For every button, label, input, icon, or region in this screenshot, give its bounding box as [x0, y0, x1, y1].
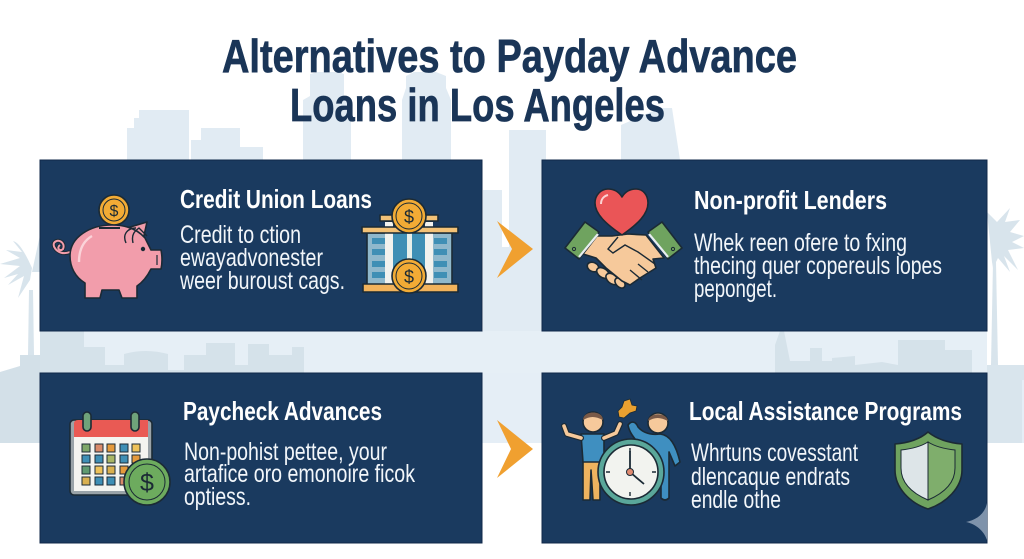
text: local assistance programs: Whrtuns covesstant — [691, 439, 858, 467]
icon: calendar with dollar coin — [70, 412, 170, 505]
text: credit union loans: Credit to ction — [180, 221, 301, 249]
arrow: bottom row — [497, 420, 533, 478]
icon: people and clock — [564, 399, 680, 505]
text: non-profit lenders: Non-profit Lenders — [694, 185, 887, 215]
icon: calendar with dollar coin: $ — [140, 469, 154, 497]
text: paycheck advances: artafice oro emonoire ficok — [184, 460, 415, 488]
text: non-profit lenders: peponget. — [694, 275, 777, 303]
title: Alternatives to Payday Advance — [222, 30, 797, 82]
arrow: top row — [497, 221, 533, 278]
text: local assistance programs: dlencaque endrats — [691, 463, 850, 491]
left palm — [0, 235, 40, 355]
text: credit union loans: Credit Union Loans — [180, 184, 372, 214]
icon: shield — [895, 432, 962, 509]
text: credit union loans: ewayadvonester — [180, 244, 323, 272]
text: local assistance programs — [689, 396, 962, 514]
title: Loans in Los Angeles — [290, 79, 665, 131]
icon: piggy bank with coin: $ — [110, 203, 119, 220]
text: paycheck advances — [183, 396, 415, 511]
background: Los Angeles skyline — [0, 72, 1024, 443]
panel: local assistance programs — [542, 373, 987, 543]
icon: bank with coins: $ — [404, 267, 414, 287]
icon: bank with coins: $ — [404, 207, 414, 227]
text: local assistance programs: Local Assistance Programs — [689, 396, 962, 426]
icon: handshake with heart — [565, 189, 682, 290]
text: credit union loans — [179, 184, 372, 295]
text: non-profit lenders: thecing quer copereuls lopes — [694, 252, 942, 280]
text: non-profit lenders: Whek reen ofere to fxing — [694, 229, 907, 257]
panel: paycheck advances — [40, 373, 482, 543]
text: non-profit lenders — [694, 185, 942, 303]
text: local assistance programs: endle othe — [691, 486, 781, 514]
text: credit union loans: weer buroust cags. — [179, 267, 345, 295]
title — [222, 30, 797, 131]
icon: bank with coins — [362, 199, 458, 293]
icon: piggy bank with coin — [54, 195, 162, 298]
text: paycheck advances: optiess. — [184, 483, 251, 511]
panel: non-profit lenders — [542, 160, 987, 331]
right palm — [987, 208, 1024, 365]
text: paycheck advances: Paycheck Advances — [183, 396, 382, 426]
text: paycheck advances: Non-pohist pettee, your — [184, 438, 387, 466]
panel: credit union loans — [40, 160, 482, 331]
icon: sparkle — [966, 503, 987, 540]
